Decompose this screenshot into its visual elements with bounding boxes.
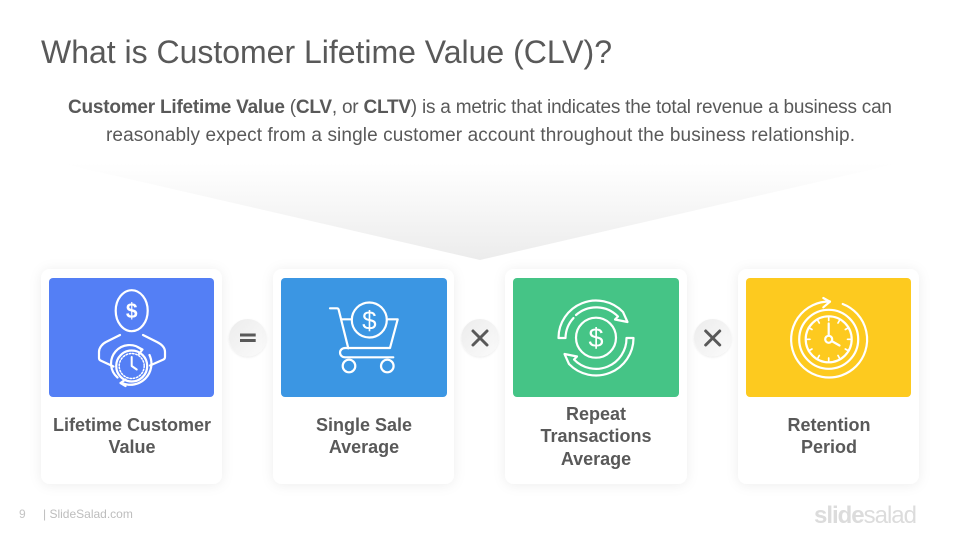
label — [53, 415, 211, 457]
label: Single Sale — [316, 415, 412, 435]
icon: person with dollar and clock — [99, 290, 165, 386]
icon: circular arrows with dollar: $ — [588, 323, 604, 353]
title: What is Customer Lifetime Value (CLV)? — [41, 34, 612, 70]
intro paragraph: reasonably expect from a single customer account throughout the business relationship. — [106, 125, 855, 146]
label — [540, 404, 652, 469]
blue tile — [281, 278, 447, 397]
label: Lifetime Customer — [53, 415, 211, 435]
icon: circular arrows with dollar — [558, 301, 634, 375]
page number: 9 — [19, 507, 26, 521]
operator: multiply — [461, 319, 499, 356]
icon: person with dollar and clock: $ — [126, 300, 138, 323]
panel: repeat transactions average — [505, 269, 687, 484]
label — [316, 415, 412, 457]
icon: clock with arrow — [791, 298, 867, 377]
intro paragraph — [68, 97, 892, 146]
label: Period — [801, 437, 857, 457]
icon: shopping cart with dollar — [330, 302, 398, 372]
label: Average — [329, 437, 399, 457]
icon: shopping cart with dollar: $ — [362, 306, 377, 336]
panel: single sale average — [273, 269, 454, 484]
panel: lifetime customer value — [41, 269, 222, 484]
operator: multiply — [694, 319, 731, 356]
funnel gradient triangle — [60, 163, 900, 260]
label: Transactions — [540, 426, 652, 446]
label: Average — [561, 449, 631, 469]
label — [788, 415, 870, 457]
label: Repeat — [566, 404, 626, 424]
operator: equals — [229, 319, 266, 356]
green tile — [513, 278, 679, 397]
label: Value — [108, 437, 156, 457]
panel: retention period — [738, 269, 919, 484]
yellow tile — [746, 278, 911, 397]
intro paragraph: Customer Lifetime Value (CLV, or CLTV) is a metric that indicates the total revenue a business can — [68, 97, 892, 118]
blue tile — [49, 278, 214, 397]
label: Retention — [788, 415, 870, 435]
brand logo wordmark: slidesalad — [814, 502, 917, 529]
footer site text: | SlideSalad.com — [43, 507, 133, 521]
